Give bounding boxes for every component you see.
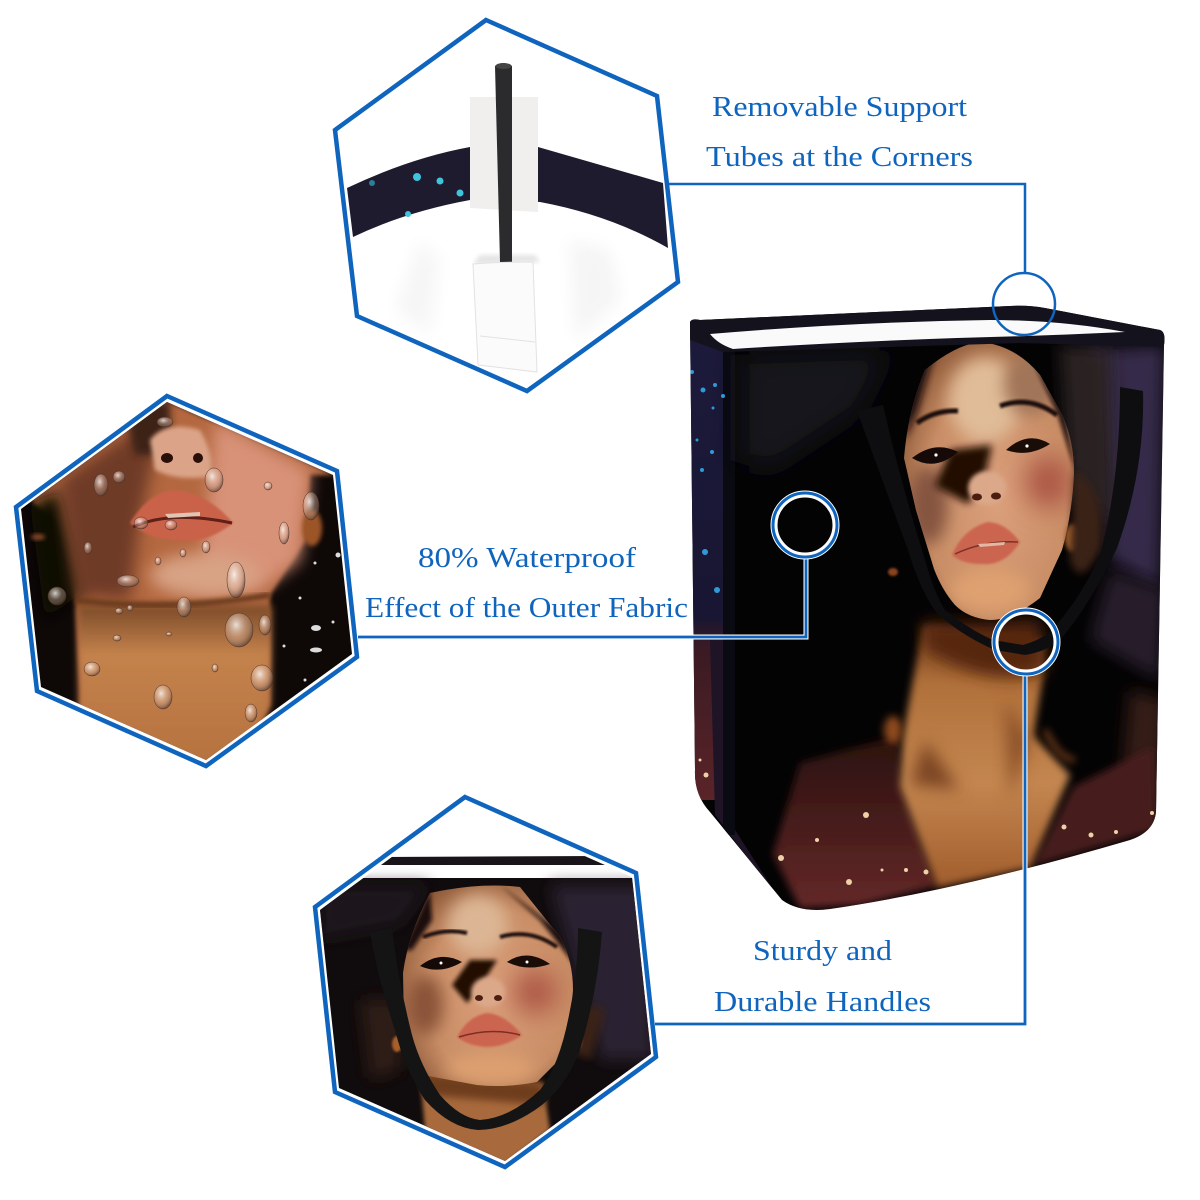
callout: waterproof fabric: [358, 493, 837, 637]
hexagon detail: waterproof droplets: [10, 390, 360, 770]
callout: removable support tubes: [668, 92, 1055, 335]
product: printed laundry basket: [685, 300, 1170, 920]
callout: waterproof fabric: 80% Waterproof: [418, 543, 637, 574]
callout: sturdy handles: Durable Handles: [714, 987, 931, 1018]
callout: sturdy handles: [655, 610, 1058, 1024]
callout: waterproof fabric: Effect of the Outer Fabric: [365, 593, 688, 624]
callout: sturdy handles: Sturdy and: [753, 936, 892, 967]
hexagon detail: handles: [310, 790, 660, 1178]
hexagon detail: support tube: [335, 20, 678, 391]
straps: [857, 387, 1143, 655]
straps: [370, 928, 602, 1130]
callout: removable support tubes: Tubes at the Corners: [706, 142, 973, 173]
callout: removable support tubes: Removable Support: [712, 92, 967, 123]
